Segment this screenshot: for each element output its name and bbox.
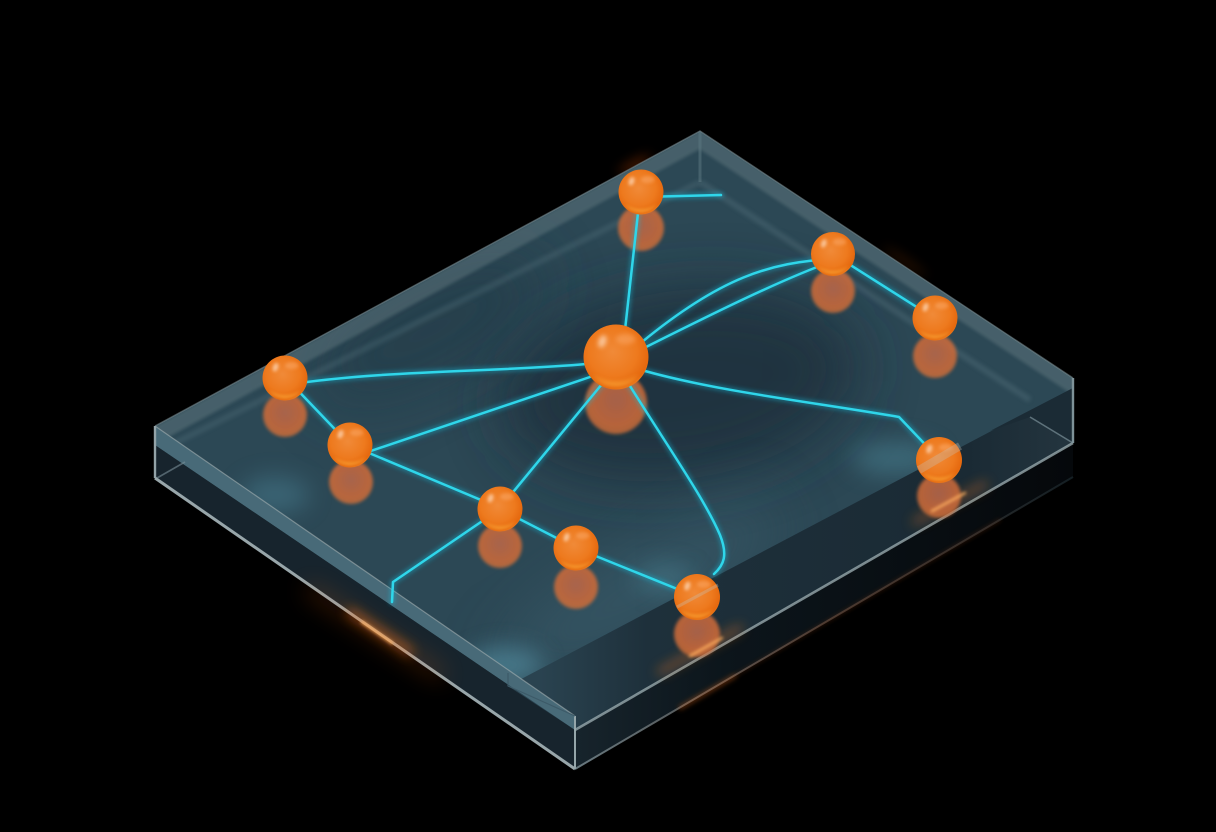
orange node spheres: [262, 170, 962, 620]
network connections: [286, 195, 938, 602]
back edge glass bands: [150, 131, 1080, 448]
slab edges: [155, 131, 1073, 769]
sphere reflections: [263, 205, 961, 657]
slab top surface: [150, 131, 1080, 730]
orange edge glows: [310, 484, 1000, 708]
slab left side face: [155, 445, 575, 769]
glass seam across front spheres: [677, 446, 960, 607]
slab front-left glass band: [155, 426, 575, 730]
slab front dark band: [508, 388, 1073, 730]
hot edge highlights: [362, 493, 965, 656]
illustration: glass slab network: [154, 130, 1074, 770]
slab right lower face: [575, 443, 1073, 770]
ambient glow behind back edges: [617, 153, 928, 279]
